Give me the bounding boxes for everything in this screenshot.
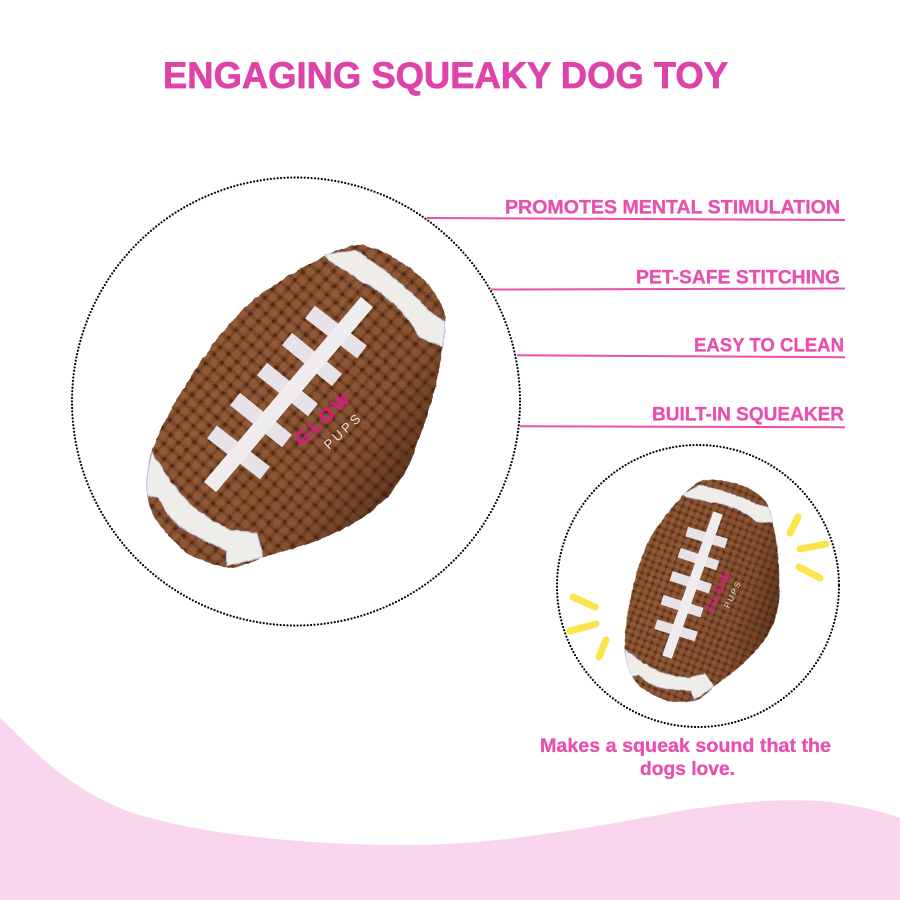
title: ENGAGING SQUEAKY DOG TOY <box>163 55 728 96</box>
small logo: Glow Pups: GLOW <box>702 569 734 614</box>
feature: pet-safe stitching: PET-SAFE STITCHING <box>636 266 840 288</box>
squeak caption <box>540 736 831 780</box>
small football toy <box>576 462 824 719</box>
squeak caption: Makes a squeak sound that the <box>540 736 831 757</box>
logo: Glow Pups: GLOW <box>291 389 355 451</box>
feature: built-in squeaker: BUILT-IN SQUEAKER <box>652 404 844 426</box>
feature: easy to clean: EASY TO CLEAN <box>694 334 844 356</box>
feature: promotes mental stimulation: PROMOTES MENTAL STIMULATION <box>505 196 840 218</box>
small logo: Glow Pups: PUPS <box>722 580 743 610</box>
small dotted circle <box>557 445 839 727</box>
pink wave background <box>0 718 900 900</box>
icon: squeak marks left <box>570 597 606 657</box>
small logo: Glow Pups <box>692 564 750 619</box>
logo: Glow Pups: PUPS <box>321 411 363 452</box>
large football toy <box>147 245 445 568</box>
large dotted circle <box>72 178 520 626</box>
squeak caption: dogs love. <box>640 759 735 780</box>
icon: squeak marks right <box>790 517 826 578</box>
